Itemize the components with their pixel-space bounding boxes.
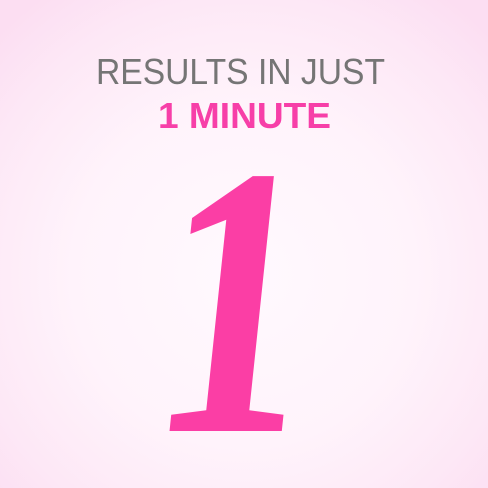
heading line: results in just: RESULTS IN JUST xyxy=(96,51,385,92)
heading xyxy=(96,51,385,136)
heading line: 1 minute: 1 MINUTE xyxy=(158,95,331,136)
